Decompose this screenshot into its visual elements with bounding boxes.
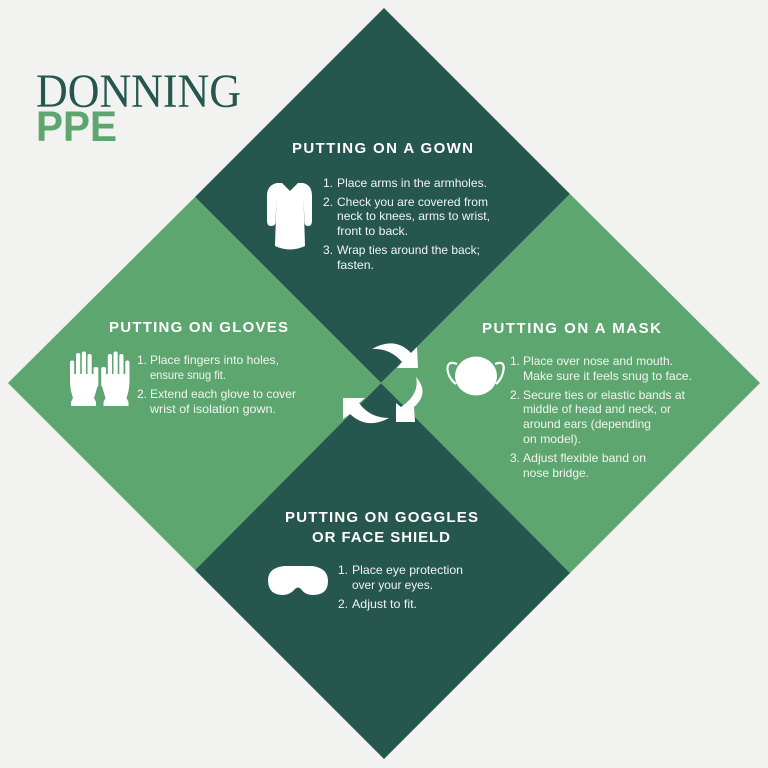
list: gown steps: neck to knees, arms to wrist,: [337, 209, 490, 223]
logo title: Donning PPE: PPE: [36, 103, 117, 151]
icon: goggles: [268, 566, 328, 595]
list: gloves steps: [137, 353, 296, 416]
list: mask steps: on model).: [523, 432, 581, 446]
list: goggles steps: Place eye protection: [352, 563, 463, 577]
list: mask steps: 3.: [510, 451, 520, 465]
panel: putting on a mask: [381, 194, 760, 573]
list: goggles steps: Adjust to fit.: [352, 597, 417, 611]
right glove: [101, 352, 130, 406]
list: goggles steps: 2.: [338, 597, 348, 611]
list: mask steps: around ears (depending: [523, 417, 651, 431]
panel: putting on goggles or face shield: [195, 383, 570, 759]
list: gown steps: [323, 176, 490, 272]
list: gown steps: fasten.: [337, 258, 374, 272]
icon: cycle arrows: [343, 343, 423, 423]
panel: putting on a gown: [195, 8, 570, 383]
list: gown steps: Wrap ties around the back;: [337, 243, 480, 257]
list: goggles steps: 1.: [338, 563, 348, 577]
list: mask steps: nose bridge.: [523, 466, 589, 480]
heading: putting on goggles or face shield: OR FACE SHIELD: [312, 529, 450, 546]
list: gloves steps: Extend each glove to cover: [150, 387, 296, 401]
list: gloves steps: 2.: [137, 387, 147, 401]
list: gloves steps: 1.: [137, 353, 147, 367]
logo title: Donning PPE: [36, 65, 241, 151]
list: goggles steps: [338, 563, 463, 611]
heading: putting on a gown: PUTTING ON A GOWN: [292, 140, 473, 157]
list: gown steps: 3.: [323, 243, 333, 257]
list: goggles steps: over your eyes.: [352, 578, 433, 592]
heading: putting on goggles or face shield: [285, 509, 478, 546]
arrow: top right: [372, 343, 418, 368]
list: gown steps: 1.: [323, 176, 333, 190]
list: mask steps: 2.: [510, 388, 520, 402]
icon: mask: [447, 356, 504, 396]
icon: gloves: [70, 352, 130, 406]
list: gown steps: front to back.: [337, 224, 408, 238]
list: gown steps: 2.: [323, 195, 333, 209]
list: mask steps: Place over nose and mouth.: [523, 354, 673, 368]
left glove: [70, 352, 98, 406]
list: mask steps: middle of head and neck, or: [523, 402, 671, 416]
list: mask steps: 1.: [510, 354, 520, 368]
list: gloves steps: Place fingers into holes,: [150, 353, 279, 367]
logo title: Donning PPE: DONNING: [36, 65, 241, 118]
list: gloves steps: wrist of isolation gown.: [149, 402, 276, 416]
heading: putting on a mask: PUTTING ON A MASK: [482, 320, 661, 337]
list: gown steps: Place arms in the armholes.: [337, 176, 487, 190]
list: mask steps: Make sure it feels snug to face.: [523, 369, 692, 383]
heading: putting on goggles or face shield: PUTTING ON GOGGLES: [285, 509, 478, 526]
icon: gown: [267, 183, 312, 250]
heading: putting on gloves: PUTTING ON GLOVES: [109, 319, 288, 336]
list: mask steps: [510, 354, 692, 480]
list: mask steps: Adjust flexible band on: [523, 451, 646, 465]
panel: putting on gloves: [8, 197, 381, 570]
list: gloves steps: ensure snug fit.: [150, 368, 226, 382]
list: gown steps: Check you are covered from: [337, 195, 488, 209]
arrow: bottom right: [396, 377, 423, 422]
arrow: bottom left: [343, 398, 389, 423]
list: mask steps: Secure ties or elastic bands at: [523, 388, 686, 402]
